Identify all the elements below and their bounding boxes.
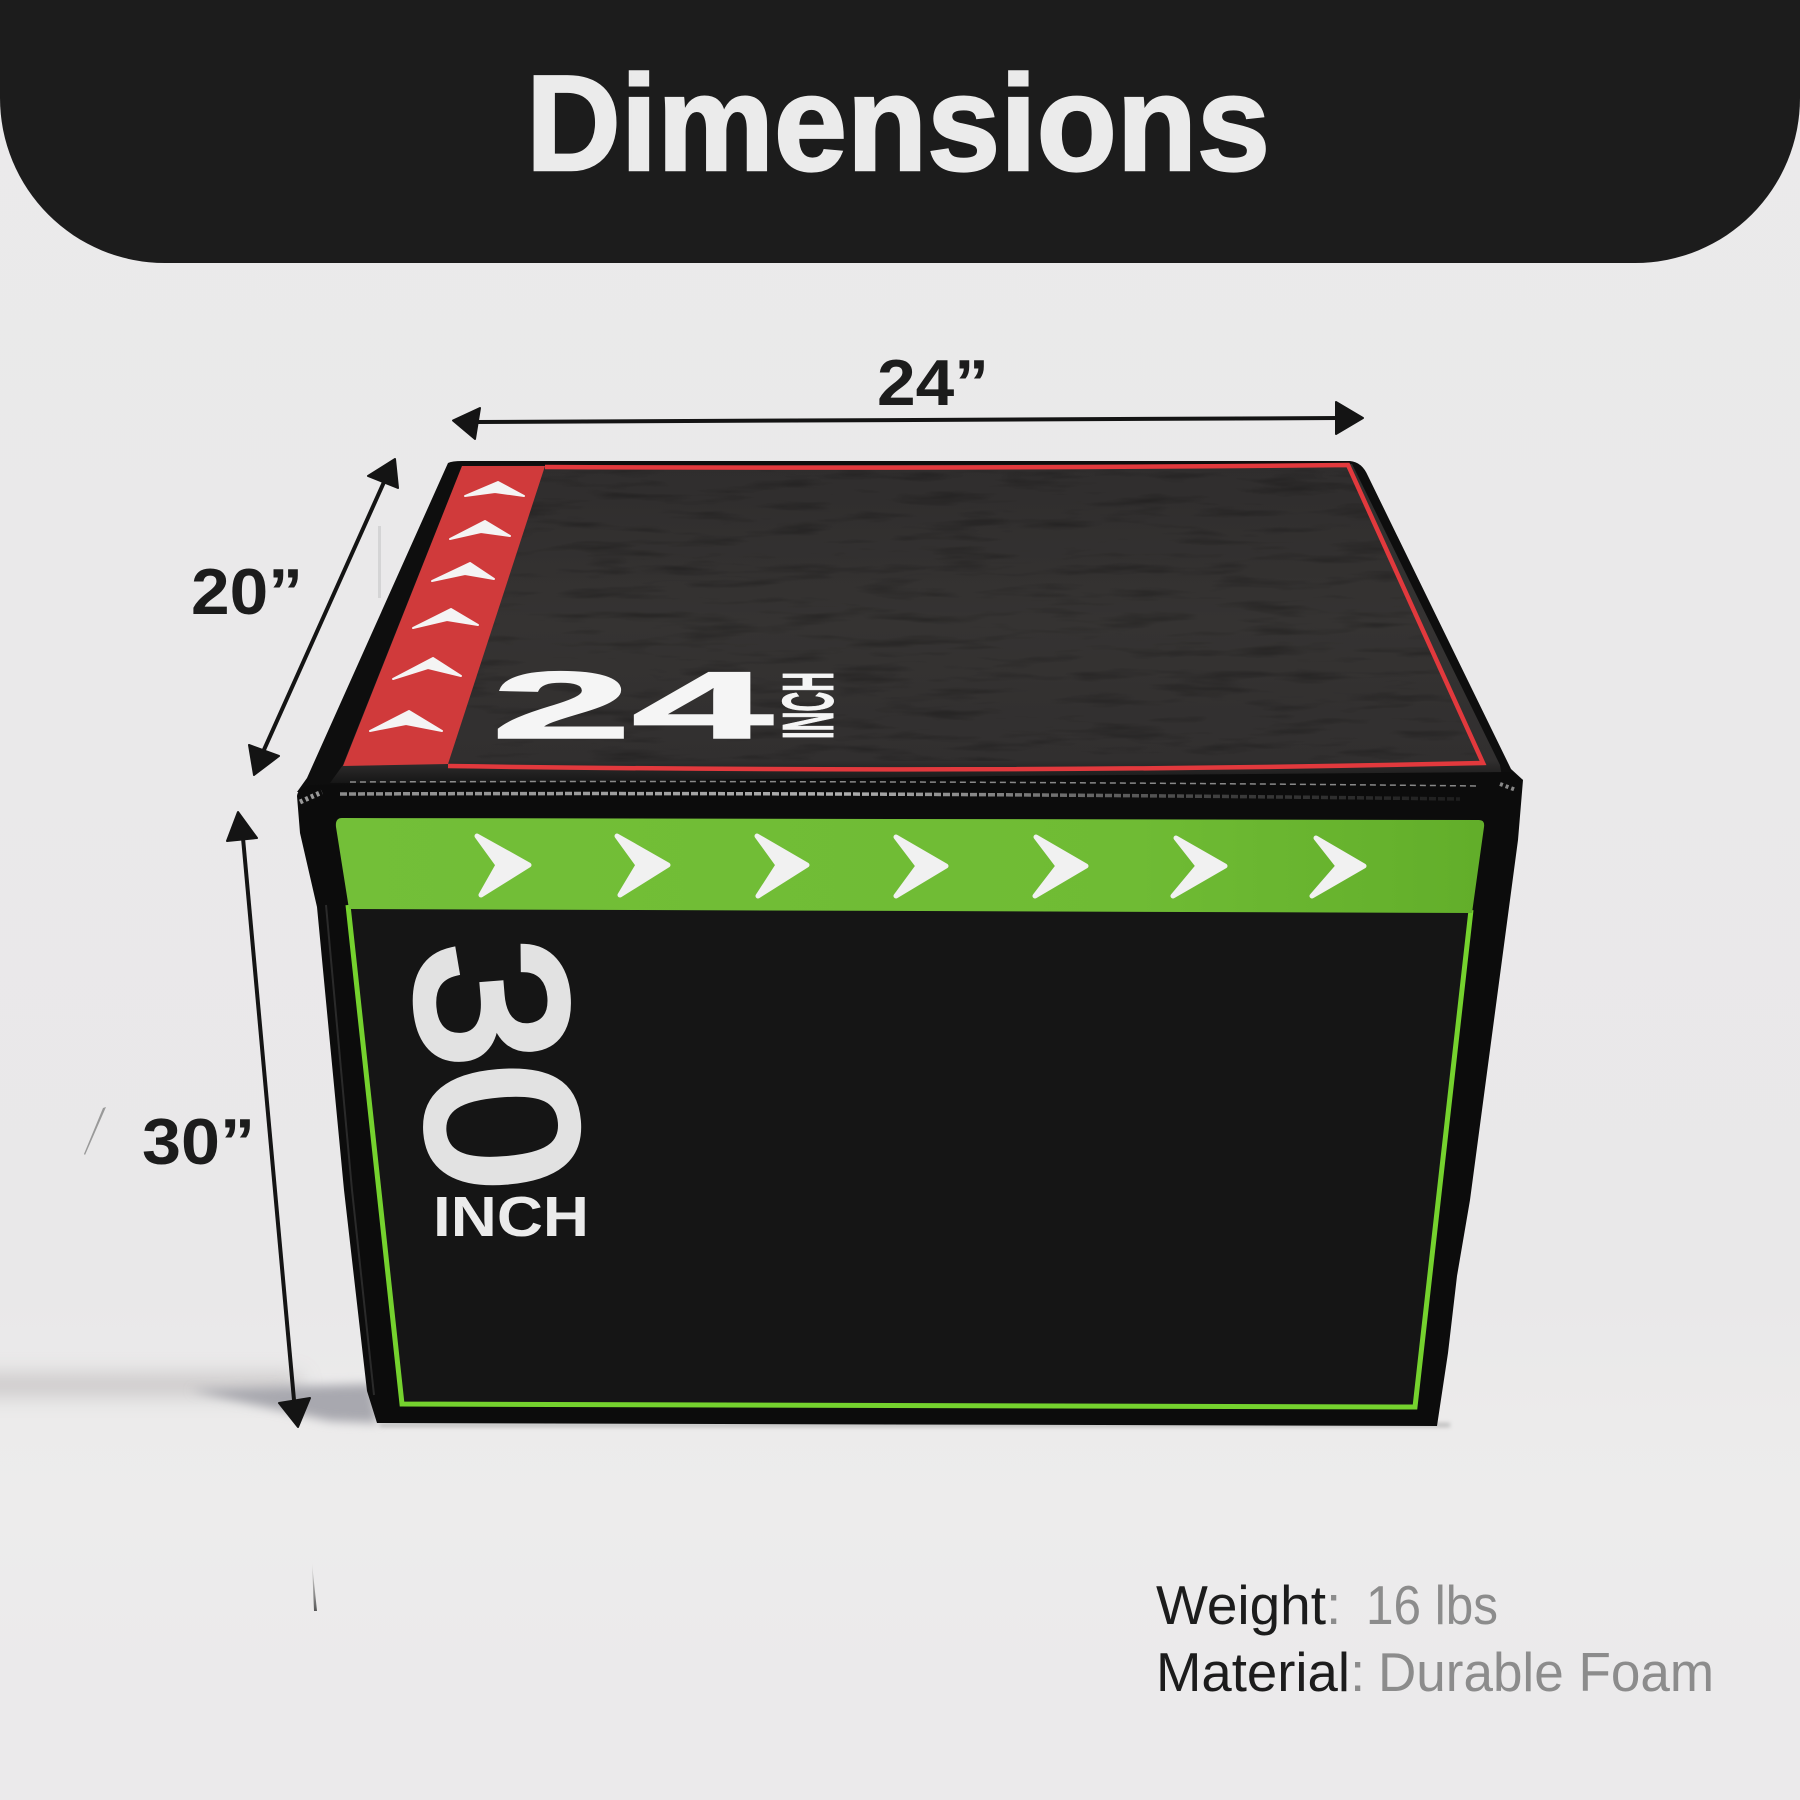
arrow: depth 20	[249, 459, 398, 775]
stray mark: wall fringe	[378, 526, 381, 598]
material line: Durable Foam	[1378, 1641, 1714, 1703]
size label: 30 inch: INCH	[433, 1185, 589, 1249]
box front face	[297, 772, 1523, 1426]
size label: 30 inch: 30	[369, 930, 626, 1199]
weight line: :	[1326, 1574, 1341, 1636]
glossy seam	[300, 782, 1516, 802]
stray mark: lower tick	[312, 1563, 317, 1611]
header banner	[0, 0, 1800, 263]
left side seam	[326, 905, 374, 1395]
box top face	[297, 460, 1523, 792]
size label: 24 inch: 24	[491, 653, 773, 759]
stray mark: left slash	[84, 1107, 106, 1155]
plyo box	[297, 460, 1523, 1426]
label: 30 inches: 30”	[142, 1105, 255, 1178]
arrow: height 30	[227, 812, 310, 1427]
green band	[336, 818, 1484, 913]
floor shadow	[0, 1376, 1450, 1427]
red border line	[448, 465, 1483, 769]
green border line	[348, 905, 1471, 1407]
material line	[1156, 1641, 1714, 1703]
label: 24 inches: 24”	[877, 346, 989, 419]
red strip chevrons	[370, 482, 524, 731]
red strip	[343, 466, 545, 766]
material line: Material	[1156, 1641, 1350, 1703]
weight line: 16 lbs	[1366, 1574, 1498, 1636]
weight line: Weight	[1156, 1574, 1326, 1636]
specifications text	[1156, 1574, 1714, 1703]
box top face: INCH	[769, 672, 849, 739]
label: 20 inches: 20”	[191, 555, 303, 628]
material line: :	[1350, 1641, 1365, 1703]
arrow: width 24	[453, 402, 1363, 439]
weight line	[1156, 1574, 1498, 1636]
green band chevrons	[477, 836, 1364, 896]
size label: 24 inch	[491, 653, 849, 759]
title: Dimensions	[526, 47, 1270, 199]
inner panel	[349, 909, 1471, 1406]
